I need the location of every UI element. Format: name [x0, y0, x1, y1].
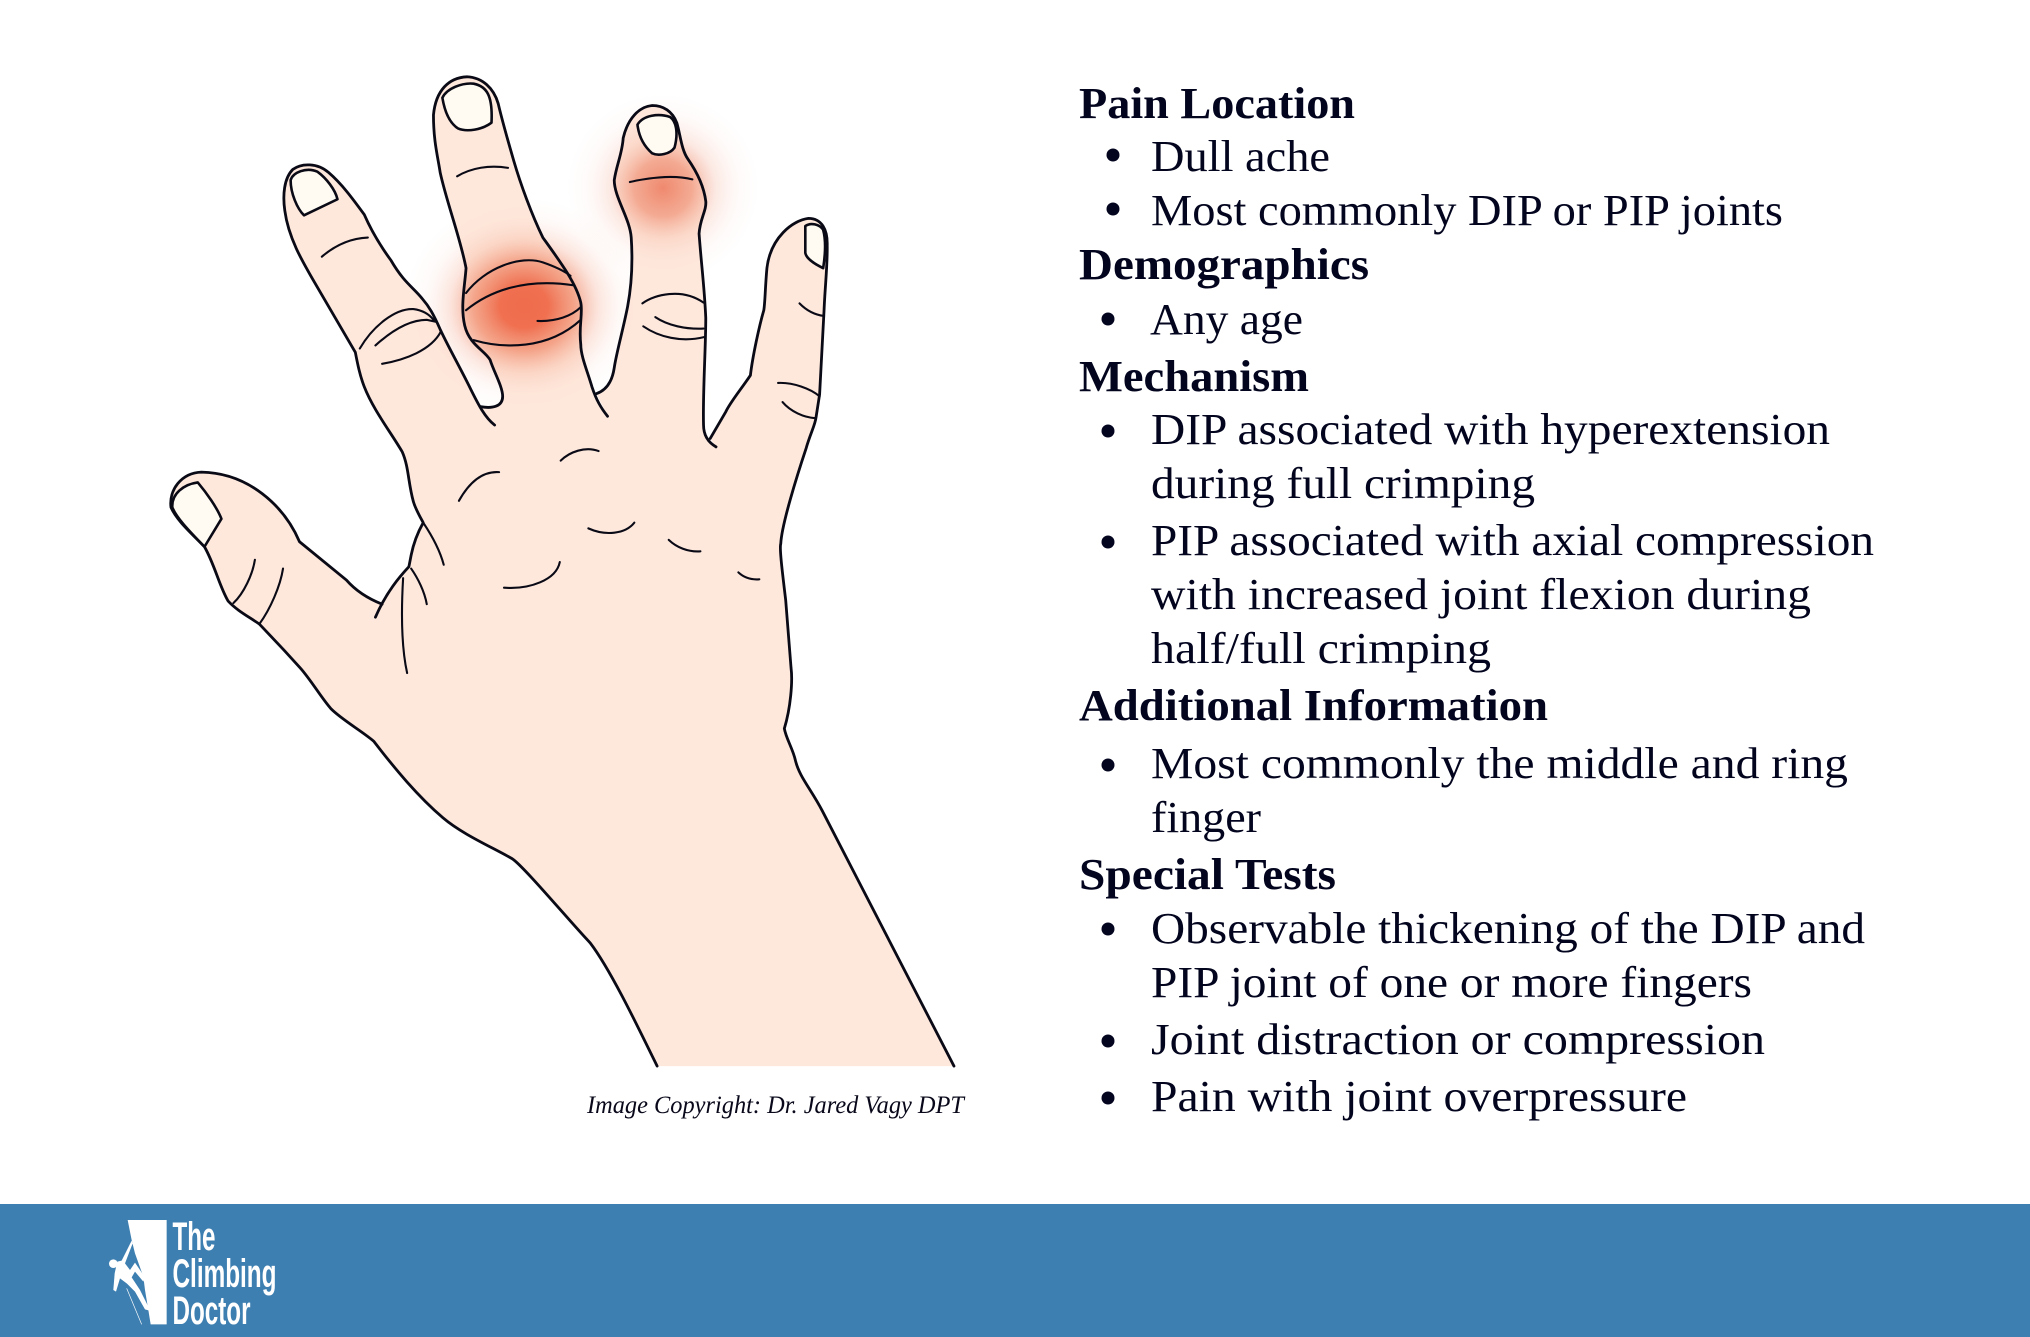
logo: The Climbing Doctor [109, 1215, 276, 1333]
section: special tests: Observable thickening of the DIP and [1151, 904, 1865, 953]
section: special tests [1079, 850, 1865, 1121]
section: pain location: Pain Location [1079, 79, 1355, 128]
section: mechanism: with increased joint flexion during [1151, 570, 1811, 619]
section: pain location [1079, 79, 1783, 235]
section: mechanism [1079, 352, 1874, 673]
section: special tests: Joint distraction or compression [1151, 1015, 1765, 1064]
footer bar [0, 1204, 2030, 1337]
illustration: hand with swollen finger joints [171, 77, 954, 1066]
logo wordmark: Doctor [172, 1289, 250, 1333]
glow: swollen PIP joint on middle finger [404, 198, 644, 414]
section: demographics: Any age [1150, 295, 1303, 344]
logo wordmark [172, 1215, 276, 1333]
text panel: clinical information [1079, 79, 1874, 1121]
section: special tests: PIP joint of one or more fingers [1151, 958, 1752, 1007]
hand skin fill [171, 77, 954, 1066]
section: pain location: Dull ache [1151, 132, 1330, 181]
icon: climber on rock wall [109, 1220, 167, 1324]
section: special tests: Pain with joint overpressure [1151, 1072, 1687, 1121]
section: additional information [1079, 681, 1848, 842]
section: additional information: Most commonly the middle and ring [1151, 739, 1848, 788]
section: pain location: Most commonly DIP or PIP joints [1151, 186, 1783, 235]
section: demographics [1079, 240, 1369, 344]
section: mechanism: DIP associated with hyperextension [1151, 405, 1830, 454]
glow: swollen DIP joint on ring finger [567, 94, 759, 282]
section: special tests: Special Tests [1079, 850, 1336, 899]
skin creases and knuckle lines [233, 167, 824, 673]
logo wordmark: The [172, 1215, 216, 1259]
section: mechanism: PIP associated with axial compression [1151, 516, 1874, 565]
fingernails [172, 84, 825, 547]
logo wordmark: Climbing [172, 1252, 276, 1296]
hand line art [171, 77, 954, 1066]
section: mechanism: half/full crimping [1151, 624, 1491, 673]
section: demographics: Demographics [1079, 240, 1369, 289]
section: mechanism: Mechanism [1079, 352, 1309, 401]
section: mechanism: during full crimping [1151, 459, 1535, 508]
section: additional information: finger [1151, 793, 1261, 842]
section: additional information: Additional Information [1079, 681, 1548, 730]
image copyright caption: Image Copyright: Dr. Jared Vagy DPT [586, 1092, 966, 1119]
hand outline [171, 77, 954, 1066]
